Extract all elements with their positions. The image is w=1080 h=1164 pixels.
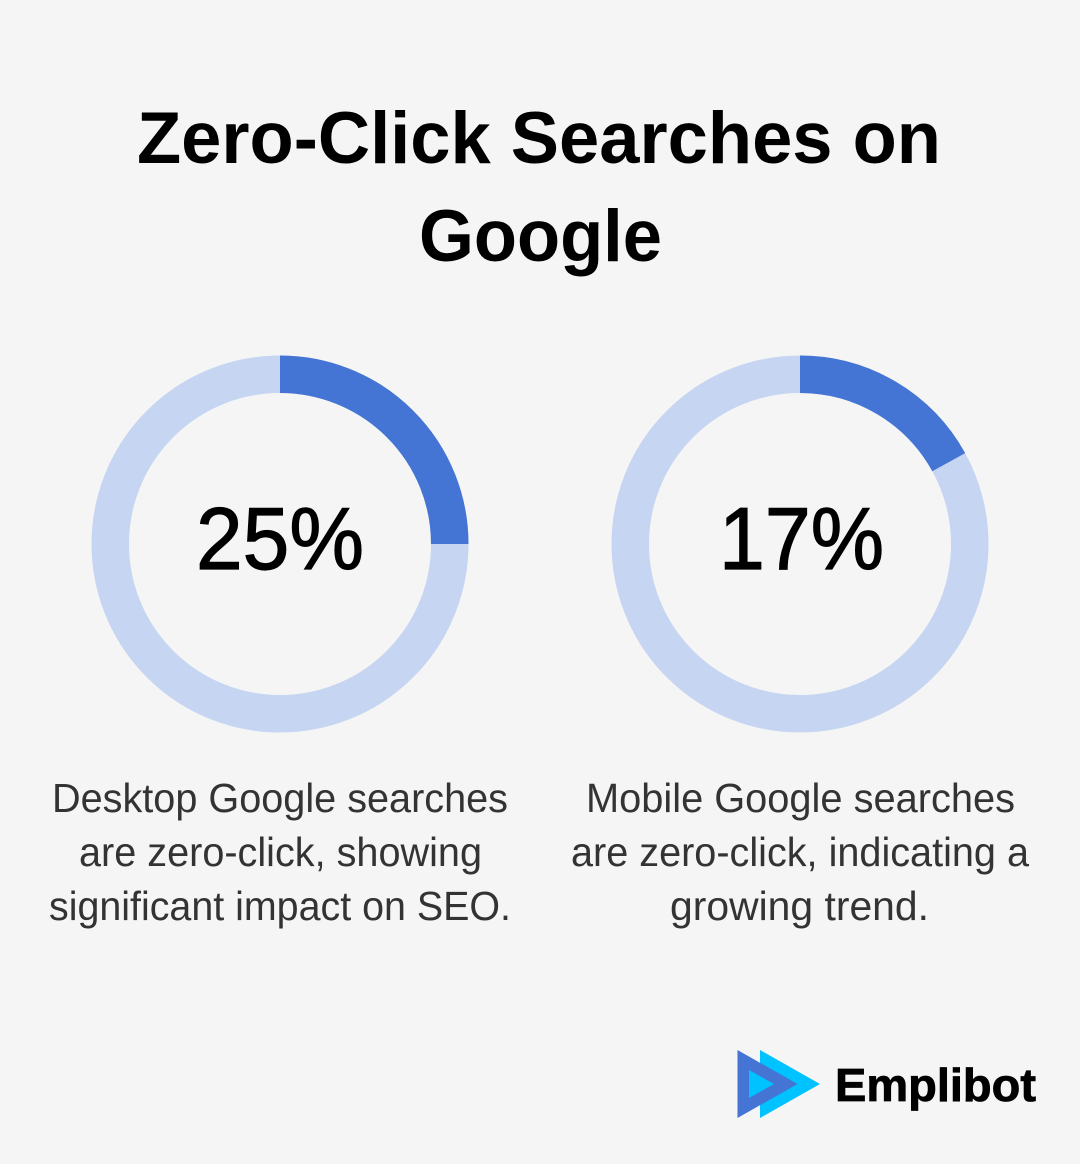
description: mobile: growing trend. bbox=[670, 883, 929, 929]
panel: mobile statistic bbox=[571, 374, 1029, 929]
logo: Emplibot bbox=[738, 1050, 1036, 1118]
description: mobile: Mobile Google searches bbox=[586, 775, 1015, 821]
description: desktop: significant impact on SEO. bbox=[49, 883, 511, 929]
value: 25%: 25% bbox=[196, 489, 364, 588]
description: desktop bbox=[49, 775, 511, 929]
title: Zero-Click Searches on bbox=[137, 98, 941, 179]
donut chart: mobile 17% bbox=[630, 374, 970, 714]
title: Google bbox=[419, 196, 662, 277]
icon: play triangles bbox=[738, 1050, 820, 1118]
description: desktop: are zero-click, showing bbox=[79, 829, 482, 875]
wordmark: Emplibot bbox=[835, 1059, 1036, 1111]
description: mobile: are zero-click, indicating a bbox=[571, 829, 1029, 875]
description: mobile bbox=[571, 775, 1029, 929]
value: 17%: 17% bbox=[719, 489, 884, 588]
panel: desktop statistic bbox=[49, 374, 511, 929]
title bbox=[137, 98, 941, 277]
description: desktop: Desktop Google searches bbox=[52, 775, 508, 821]
donut chart: desktop 25% bbox=[110, 374, 450, 714]
